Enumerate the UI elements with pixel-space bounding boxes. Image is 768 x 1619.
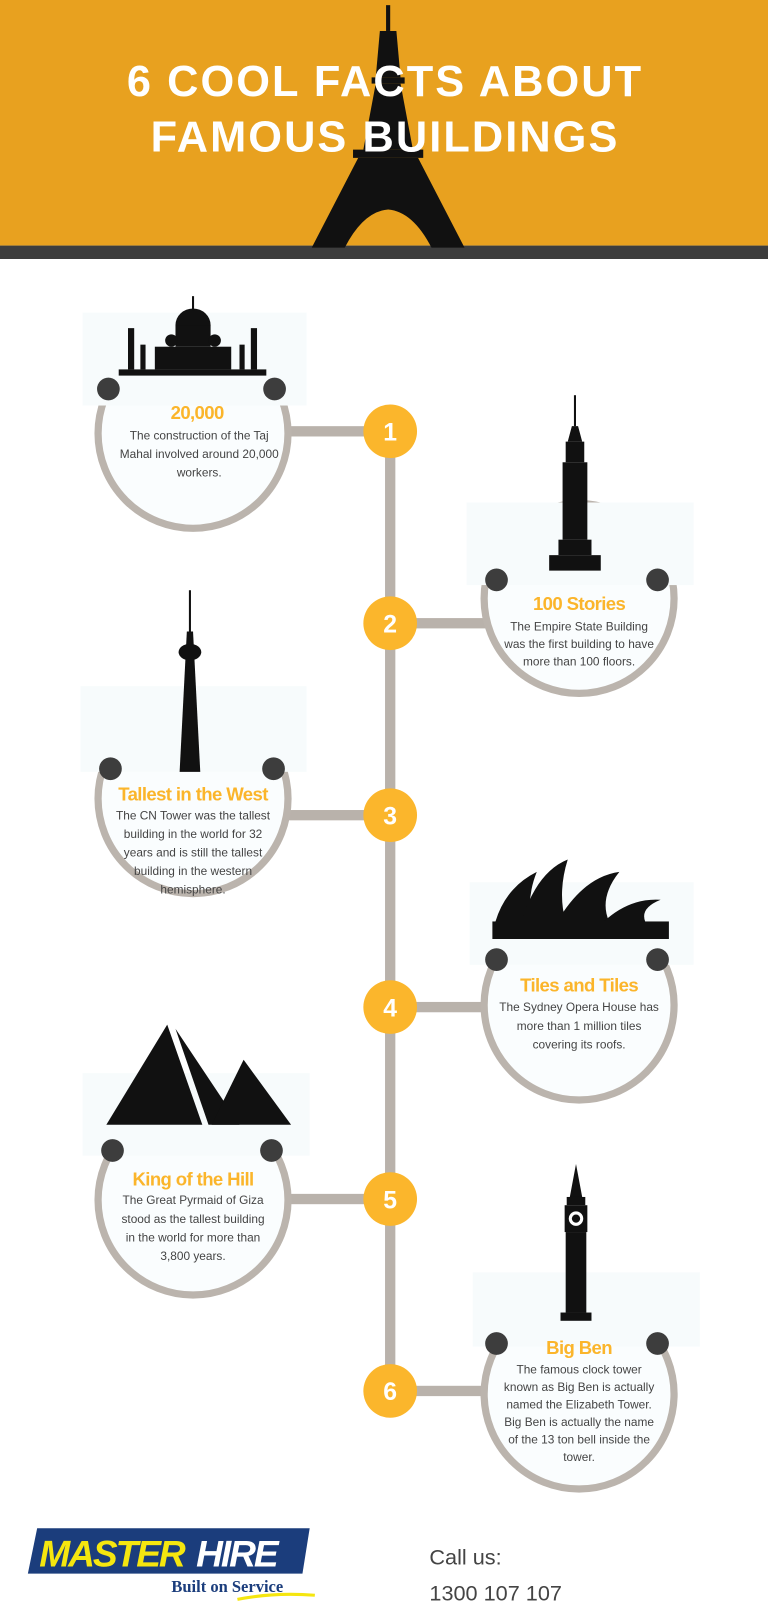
panel 6: Big Ben: of the 13 ton bell inside the <box>508 1433 650 1447</box>
icon: pyramids <box>106 1025 291 1125</box>
panel 5: Pyramids: 3,800 years. <box>160 1249 226 1263</box>
panel 6: Big Ben: Big Ben <box>546 1337 612 1358</box>
panel 3: CN Tower: hemisphere. <box>160 883 226 897</box>
panel 6: Big Ben: The famous clock tower <box>516 1362 642 1376</box>
icon: cn tower <box>179 590 201 772</box>
panel 6: Big Ben: Big Ben is actually the name <box>504 1415 654 1429</box>
icon: big ben <box>561 1164 591 1321</box>
panel 1: Taj Mahal: 20,000 <box>171 402 224 423</box>
icon: opera house <box>492 860 669 939</box>
contact <box>429 1544 562 1605</box>
panel 4: Sydney Opera House: Tiles and Tiles <box>520 975 638 996</box>
timeline line <box>385 431 395 1391</box>
panel 5: Pyramids: stood as the tallest building <box>121 1212 265 1226</box>
panel 2: Empire State: more than 100 floors. <box>523 655 635 669</box>
icon: empire state building <box>549 395 601 571</box>
title: FAMOUS BUILDINGS <box>151 114 619 162</box>
title: 6 COOL FACTS ABOUT <box>127 58 643 106</box>
logo: masterhire: Built on Service <box>171 1577 283 1596</box>
contact: 1300 107 107 <box>429 1580 562 1605</box>
panel 5: Pyramids <box>83 1025 310 1295</box>
number markers: 1 <box>383 420 397 447</box>
panel 2: Empire State: was the first building to have <box>503 637 654 651</box>
panel 5: Pyramids: The Great Pyrmaid of Giza <box>122 1193 264 1207</box>
panel 3: CN Tower <box>81 590 307 897</box>
panel 1: Taj Mahal: Mahal involved around 20,000 <box>120 447 279 461</box>
panel 1: Taj Mahal: The construction of the Taj <box>130 429 269 443</box>
panel 3: CN Tower: The CN Tower was the tallest <box>116 808 271 822</box>
panel 6: Big Ben: known as Big Ben is actually <box>504 1380 654 1394</box>
panel 3: CN Tower: building in the western <box>134 864 252 878</box>
contact: Call us: <box>429 1544 502 1569</box>
connectors <box>287 426 487 1396</box>
title <box>127 58 643 162</box>
logo: masterhire <box>28 1528 315 1599</box>
number markers: 3 <box>383 803 397 830</box>
panel 3: CN Tower: Tallest in the West <box>118 784 268 805</box>
number markers: 4 <box>383 995 397 1022</box>
header <box>0 0 768 259</box>
icon: eiffel tower <box>312 5 465 248</box>
panel 1: Taj Mahal: workers. <box>176 466 222 480</box>
panel 5: Pyramids: in the world for more than <box>126 1230 260 1244</box>
panel 6: Big Ben: tower. <box>563 1450 595 1464</box>
icon: taj mahal <box>119 296 266 376</box>
panel 5: Pyramids: King of the Hill <box>132 1169 254 1190</box>
panel 4: Sydney Opera House: The Sydney Opera House has <box>499 1000 659 1014</box>
panel 2: Empire State: The Empire State Building <box>510 619 648 633</box>
panel 4: Sydney Opera House: more than 1 million tiles <box>517 1019 641 1033</box>
panel 6: Big Ben <box>473 1164 700 1489</box>
panel 1: Taj Mahal <box>83 296 307 528</box>
panel 3: CN Tower: years and is still the tallest <box>124 845 263 859</box>
number markers <box>363 404 417 1418</box>
logo: masterhire: MASTER <box>39 1532 186 1574</box>
panel 2: Empire State <box>467 395 694 693</box>
panel 2: Empire State: 100 Stories <box>533 593 626 614</box>
number markers: 2 <box>383 612 397 639</box>
number markers: 6 <box>383 1379 397 1406</box>
panel 4: Sydney Opera House <box>470 860 694 1100</box>
number markers: 5 <box>383 1187 397 1214</box>
panel 3: CN Tower: building in the world for 32 <box>124 827 262 841</box>
logo: masterhire: HIRE <box>196 1532 280 1574</box>
panel 6: Big Ben: named the Elizabeth Tower. <box>506 1398 652 1411</box>
panel 4: Sydney Opera House: covering its roofs. <box>533 1037 626 1051</box>
